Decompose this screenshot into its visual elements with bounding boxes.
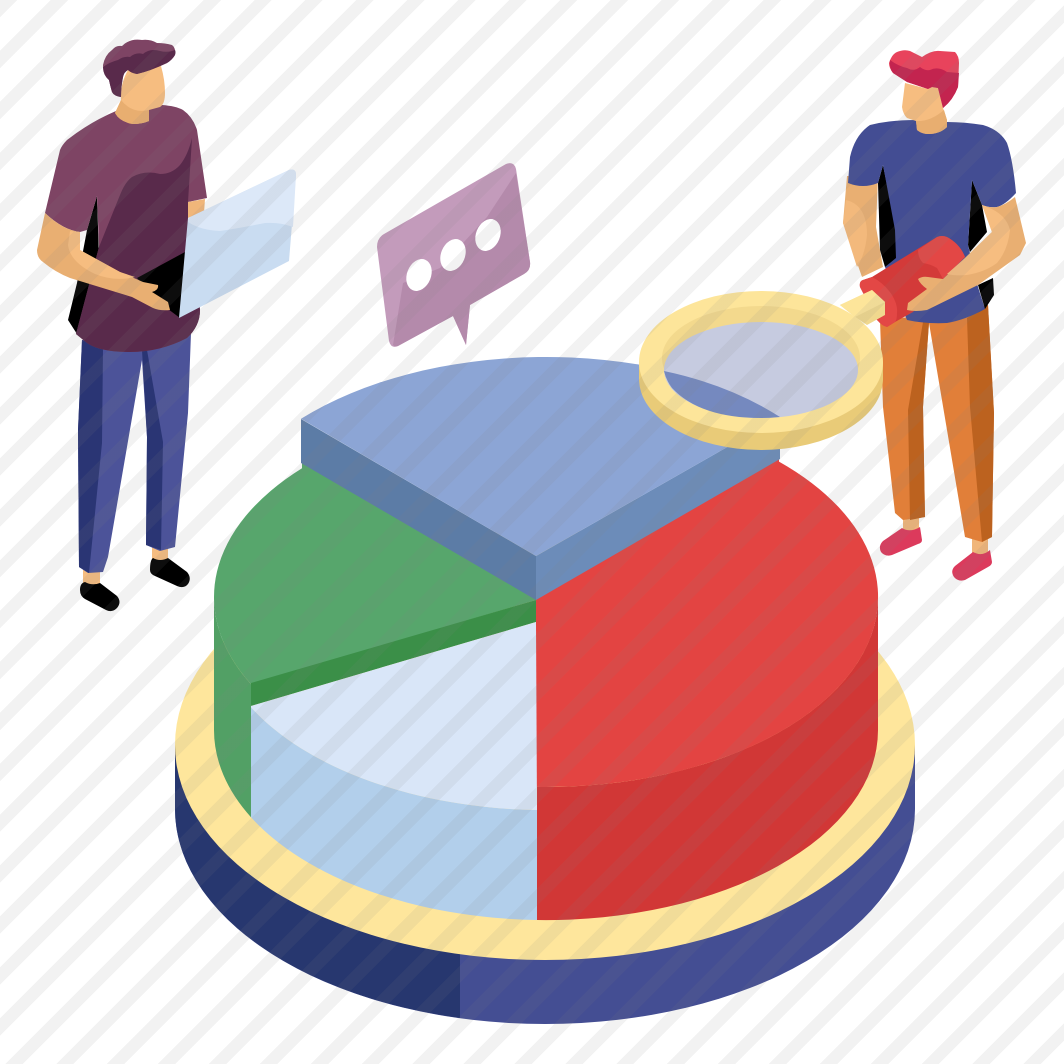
shirt <box>848 120 1016 323</box>
handle <box>840 236 965 327</box>
red slice <box>536 450 878 920</box>
head <box>103 40 176 124</box>
left arm <box>843 176 883 277</box>
head <box>889 50 959 134</box>
laptop <box>179 170 296 318</box>
trousers <box>78 333 191 573</box>
green slice <box>214 455 536 817</box>
light blue slice <box>251 622 537 920</box>
shirt <box>45 105 207 352</box>
speech bubble <box>377 163 530 347</box>
lens ring <box>639 291 883 450</box>
person with laptop <box>37 40 296 611</box>
feet <box>880 515 992 581</box>
holding arm <box>907 197 1026 311</box>
trousers <box>880 305 994 542</box>
person with magnifying glass <box>639 50 1026 581</box>
feet <box>80 545 190 611</box>
pie chart platform <box>175 530 915 1024</box>
raised blue slice <box>301 357 780 600</box>
typing dots <box>402 215 505 295</box>
arm <box>37 199 205 310</box>
pie chart <box>214 357 878 920</box>
magnifying glass <box>639 236 965 450</box>
